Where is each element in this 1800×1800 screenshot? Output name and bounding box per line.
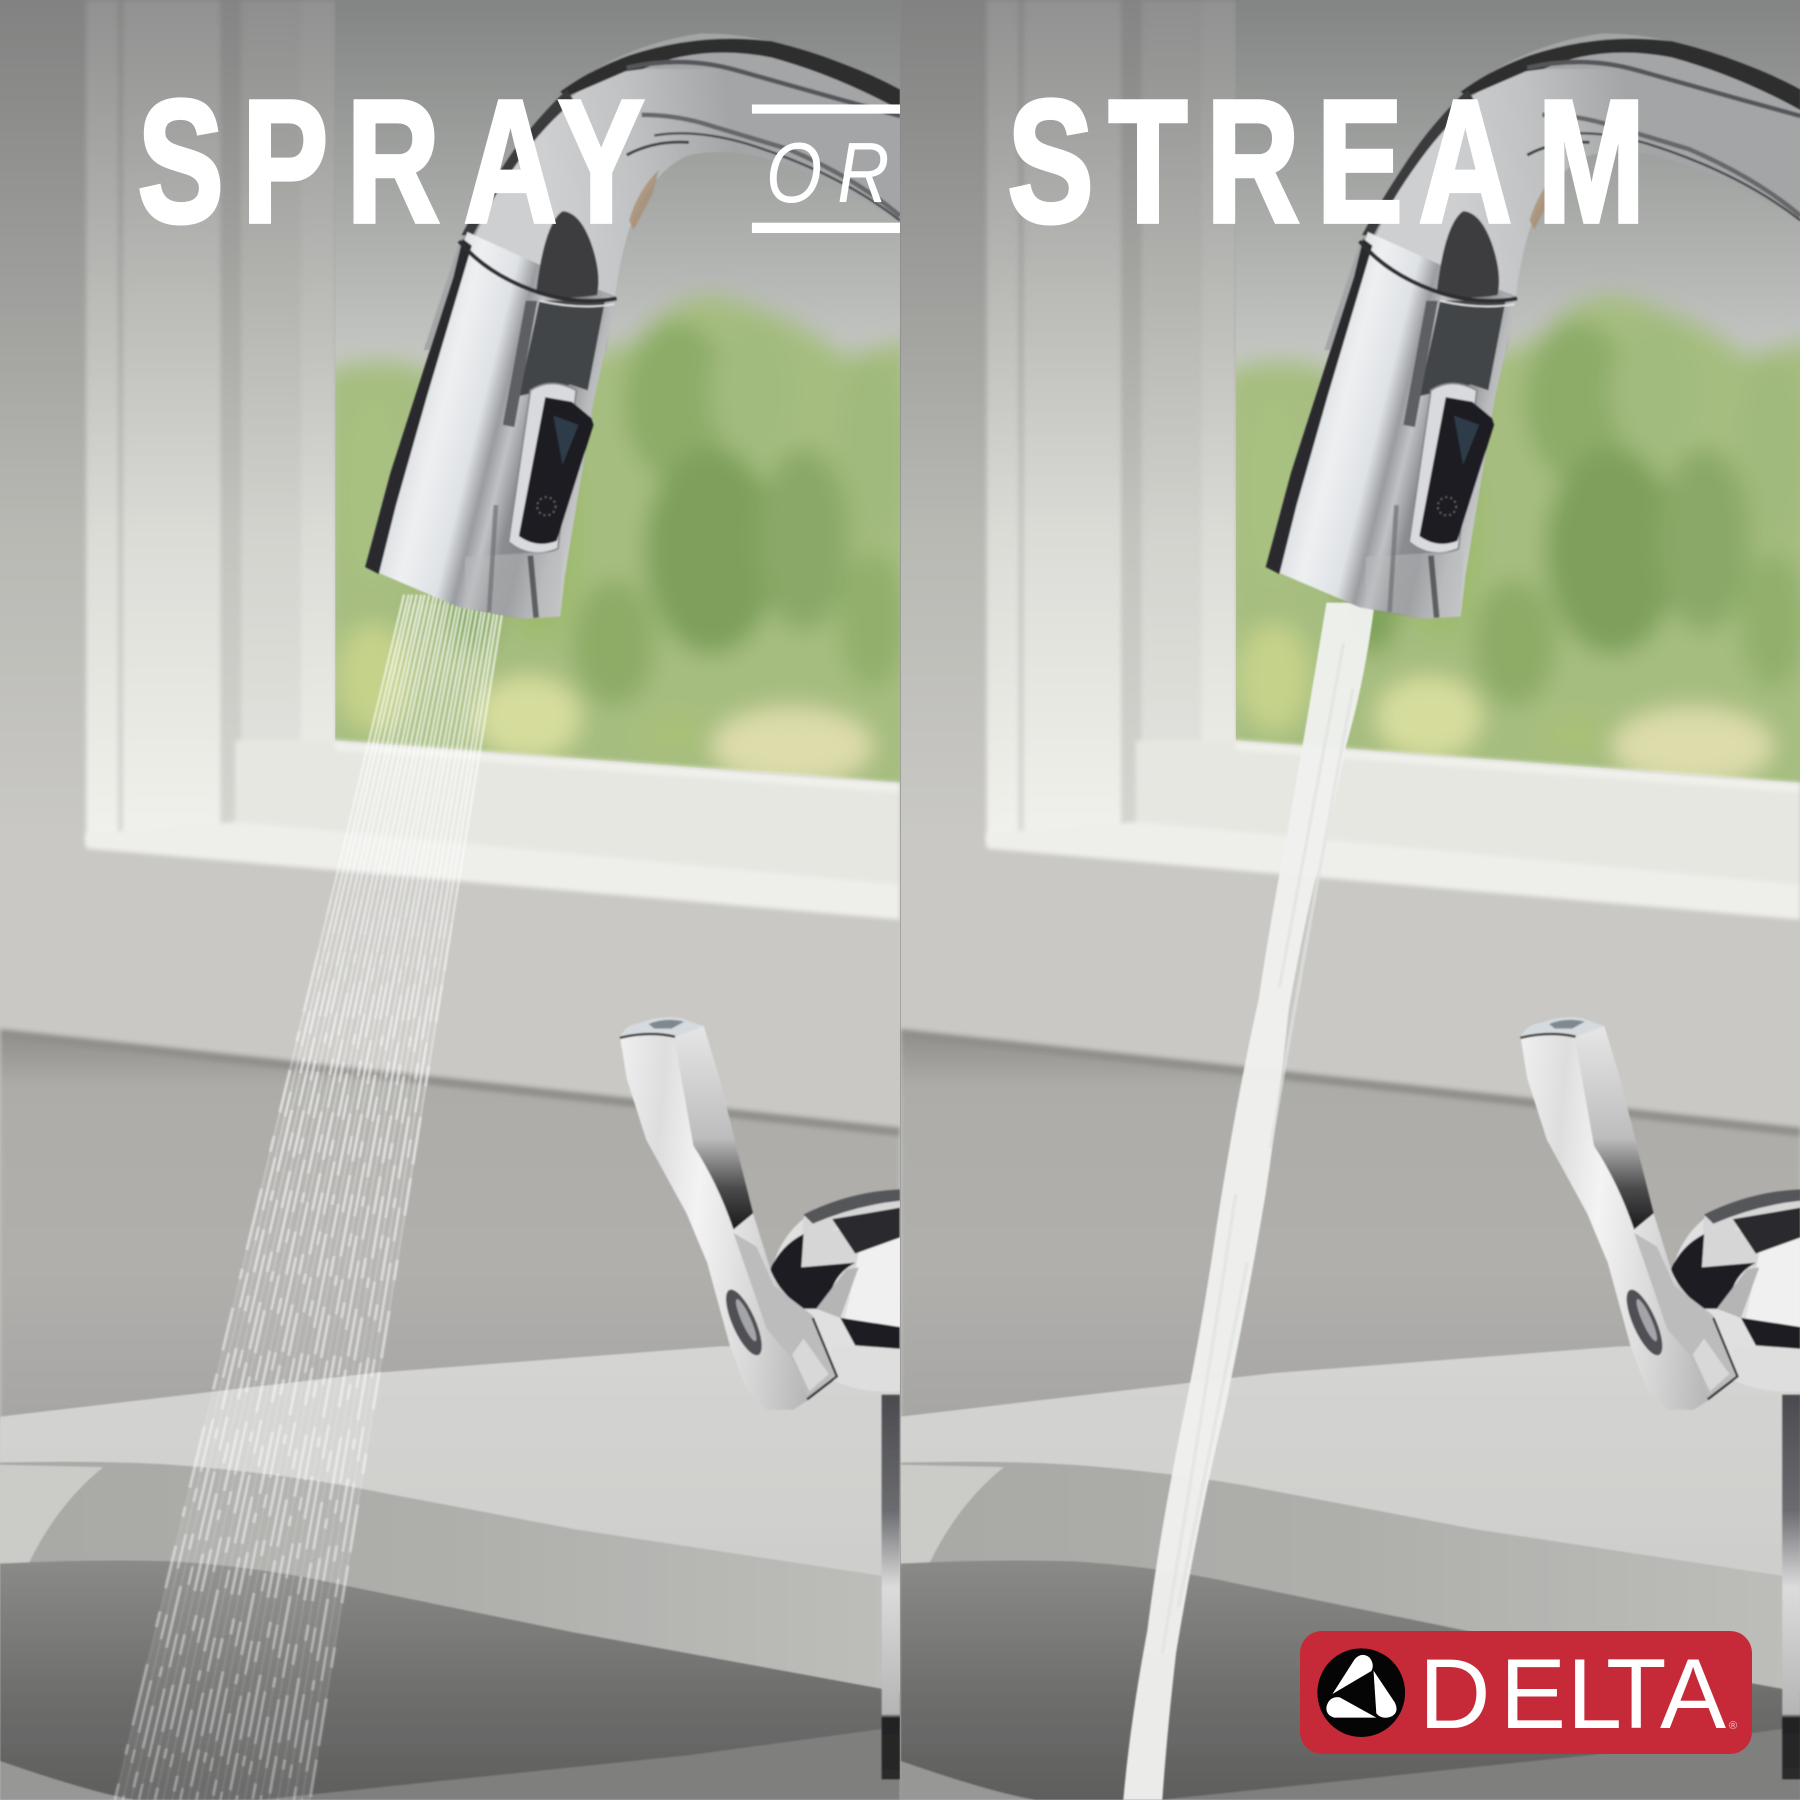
faucet: pull-down spout and handle [365,33,957,1779]
heading: OR with rules [752,104,900,233]
heading: SPRAY: SPRAY [138,64,644,259]
logo: Delta badge [1300,1631,1752,1754]
background: kitchen window and counter [901,0,1800,1800]
wordmark: DELTA: DELTA [1419,1638,1726,1749]
icon: Delta triangle mark [1317,1648,1405,1737]
stream water column [1123,603,1375,1800]
heading: STREAM: STREAM [1007,64,1645,259]
background: kitchen window and counter [0,0,918,1800]
panel: spray (left) [0,0,957,1800]
faucet: pull-down spout and handle [1266,33,1800,1779]
spray water jets [115,595,505,1800]
registered mark: ® [1729,1720,1737,1732]
heading: OR with rules: OR [766,126,889,220]
panel: stream (right) [901,0,1800,1800]
